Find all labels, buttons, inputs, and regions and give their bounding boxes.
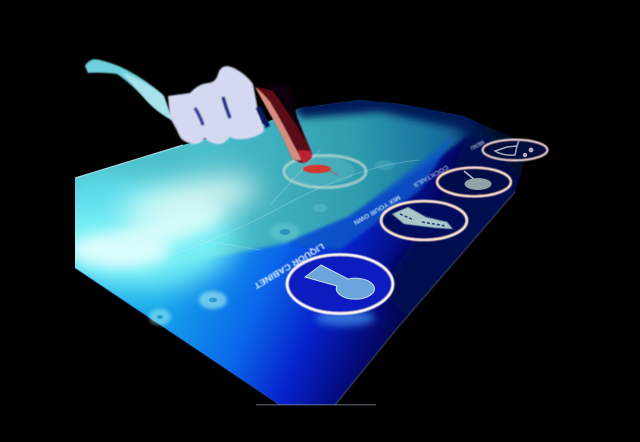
- panel: glowing touch table: [74, 100, 525, 406]
- upper teal area of the screen: [75, 100, 473, 258]
- label: menu: MENU: [468, 138, 485, 151]
- top-left cyan tint: [60, 181, 140, 209]
- lit edge of the finger: [255, 87, 302, 160]
- label: cocktails: COCKTAILS: [412, 163, 449, 187]
- finger body in deep red: [255, 87, 312, 163]
- bright cyan left glow: [35, 186, 235, 290]
- button: cocktails: [437, 168, 511, 196]
- dark fade along the far top edge: [295, 100, 514, 140]
- finger creases: [195, 108, 203, 125]
- small glowing dots: [149, 160, 395, 325]
- label: liquor cabinet: LIQUOR CABINET: [252, 241, 326, 290]
- hand pointing at the table: [85, 59, 312, 163]
- icon: face shape: [495, 140, 533, 157]
- blue band glow: [287, 135, 455, 250]
- button: menu: [482, 140, 548, 160]
- bottom edge artefact: [256, 404, 376, 405]
- icon: key shape: [305, 265, 374, 299]
- button: mix your own: [381, 201, 467, 240]
- wrist and thumb-side streak: [85, 59, 172, 120]
- blue glow below the large button: [315, 310, 375, 326]
- faint lines across the screen: [150, 150, 420, 262]
- white centre glow: [117, 166, 263, 238]
- pointing finger: [255, 84, 312, 163]
- icon: bottle shape: [392, 207, 453, 229]
- selected target ring with red marker: [284, 156, 366, 188]
- darkening of the far menu band: [386, 132, 525, 312]
- knuckles: [168, 66, 264, 144]
- dark fade at far corner: [469, 119, 525, 181]
- red tip: [298, 150, 312, 163]
- shadow merging with the dark background: [268, 84, 305, 140]
- label: mix your own: MIX YOUR OWN: [352, 193, 402, 226]
- table edges: [75, 145, 183, 178]
- icon: round glass: [464, 171, 492, 190]
- button: liquor cabinet: [287, 254, 393, 314]
